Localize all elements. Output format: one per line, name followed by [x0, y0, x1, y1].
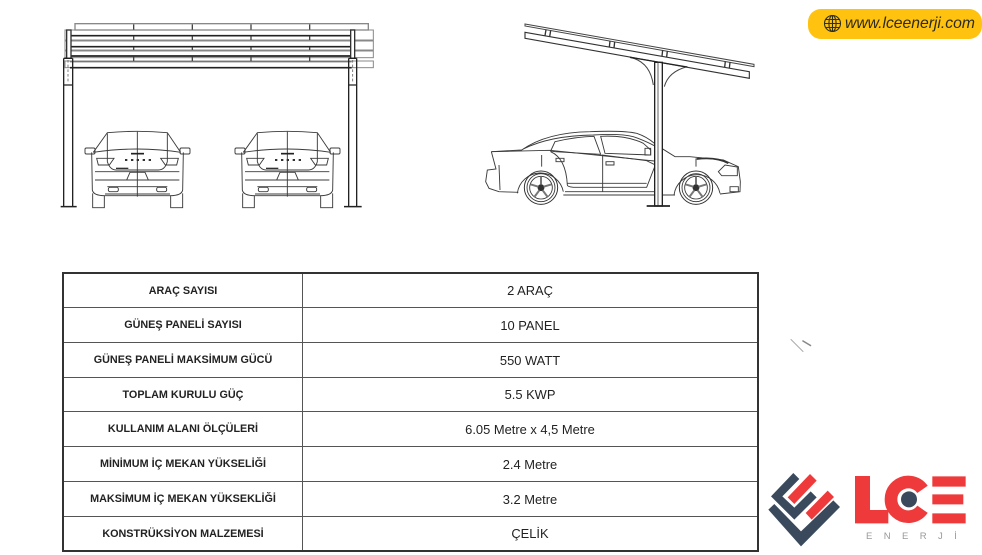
specification table: ÇELİK	[511, 526, 549, 541]
specification table: 5.5 KWP	[505, 387, 555, 402]
specification table: 2.4 Metre	[503, 456, 557, 472]
specification table: MAKSİMUM İÇ MEKAN YÜKSEKLİĞİ	[90, 493, 276, 505]
logo subtitle: ENERJİ	[866, 531, 968, 542]
specification table	[62, 272, 759, 552]
specification table: KULLANIM ALANI ÖLÇÜLERİ	[108, 423, 258, 435]
solar panel rows	[65, 24, 373, 68]
specification table: 6.05 Metre x 4,5 Metre	[465, 422, 595, 436]
specification table: 550 WATT	[500, 352, 560, 368]
specification table: ARAÇ SAYISI	[149, 284, 217, 296]
specification table: KONSTRÜKSİYON MALZEMESİ	[102, 528, 264, 540]
side view carport drawing	[486, 24, 754, 206]
tilted solar panel	[525, 24, 754, 78]
logo letters	[855, 476, 966, 523]
website address: www.lceenerji.com	[845, 15, 975, 32]
left column	[61, 30, 77, 207]
wheels	[524, 171, 713, 204]
icon: globe	[824, 15, 842, 32]
right column	[344, 30, 362, 207]
side car	[486, 131, 740, 195]
specification table: 10 PANEL	[500, 318, 560, 332]
specification table: 3.2 Metre	[503, 492, 557, 506]
specification table: 2 ARAÇ	[507, 283, 553, 298]
specification table: GÜNEŞ PANELİ SAYISI	[124, 319, 242, 331]
car front right	[235, 131, 340, 208]
logo mark	[768, 473, 840, 546]
small stray mark	[791, 340, 810, 352]
website pill	[808, 9, 982, 39]
front view carport drawing	[61, 24, 373, 208]
specification table: TOPLAM KURULU GÜÇ	[123, 388, 243, 400]
car front left	[85, 131, 190, 208]
specification table: MİNİMUM İÇ MEKAN YÜKSELİĞİ	[100, 458, 266, 470]
specification table: GÜNEŞ PANELİ MAKSİMUM GÜCÜ	[94, 354, 272, 366]
column and brackets	[630, 57, 687, 206]
